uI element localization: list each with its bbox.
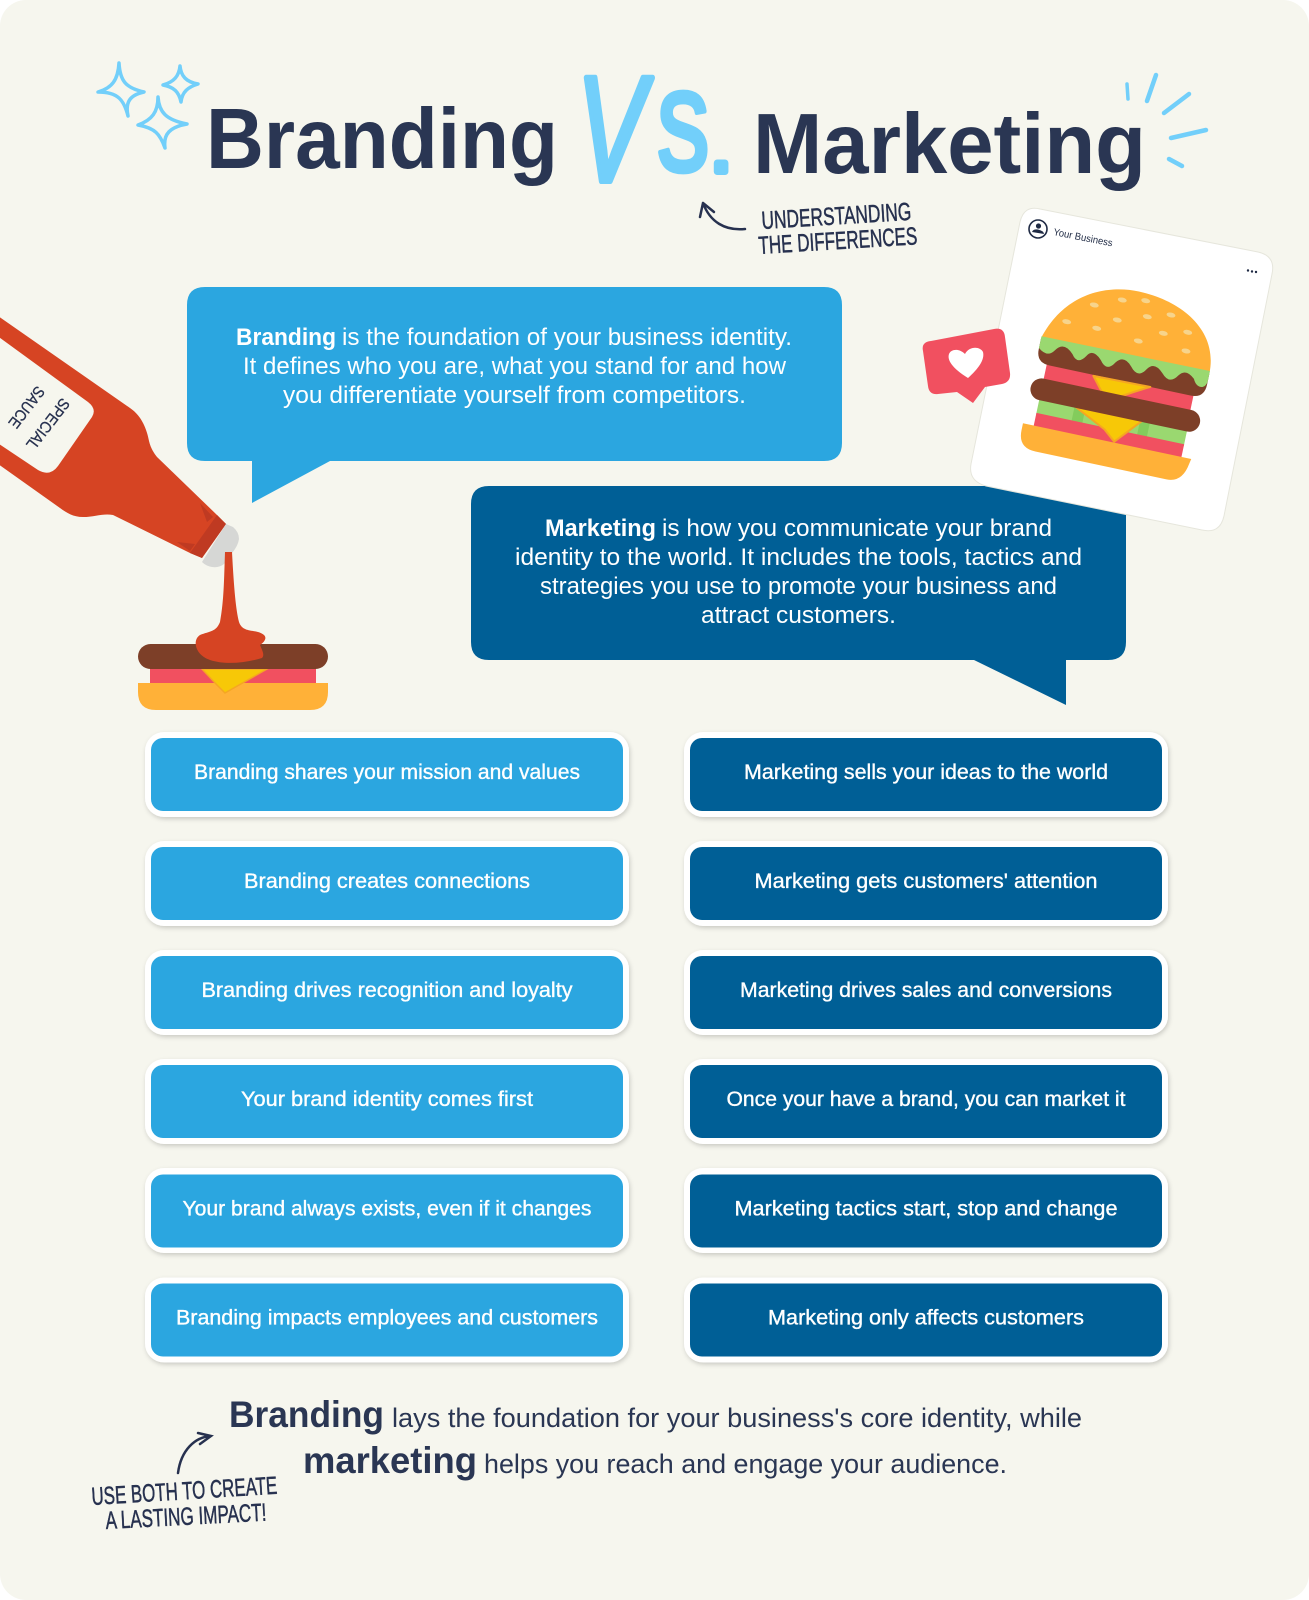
branding row 4: Your brand identity comes first — [241, 1088, 533, 1111]
bottle cap — [202, 524, 239, 567]
lettuce upper — [1038, 335, 1210, 388]
marketing row 5: Marketing tactics start, stop and change — [734, 1198, 1118, 1220]
subtitle line 1: UNDERSTANDING — [761, 198, 912, 235]
post name: Your Business — [1052, 227, 1113, 249]
cheese — [202, 669, 267, 693]
closing word: Branding: Branding — [229, 1394, 384, 1435]
closing line 2: helps you reach and engage your audience. — [484, 1449, 1007, 1479]
branding row 3: Branding drives recognition and loyalty — [202, 979, 573, 1002]
bubble text: It defines who you are, what you stand for and how — [243, 353, 787, 380]
branding row 6: Branding impacts employees and customers — [176, 1306, 598, 1330]
closing line 1: lays the foundation for your business's core identity, while — [392, 1403, 1082, 1433]
title word: Vs.: . — [710, 100, 732, 188]
icon: sparkles — [98, 63, 198, 148]
branding row 1: Branding shares your mission and values — [194, 761, 580, 784]
bubble text: is the foundation of your business identity. — [342, 324, 792, 351]
marketing row 6: Marketing only affects customers — [768, 1306, 1084, 1330]
lettuce lower — [1036, 394, 1188, 446]
title word: Marketing: Marketing — [753, 97, 1146, 192]
title word: Vs.: V — [577, 47, 653, 214]
icon: bottom burger with sauce — [138, 552, 328, 710]
bottle label — [0, 335, 94, 473]
panel: branding speech bubble — [187, 287, 842, 503]
marketing row 4 — [684, 1059, 1168, 1144]
marketing row 5 — [684, 1168, 1168, 1253]
bubble text: you differentiate yourself from competitors. — [283, 382, 746, 409]
icon: burger — [1018, 274, 1224, 484]
comparison rows: branding column — [145, 732, 629, 1362]
closing statement — [229, 1394, 1082, 1481]
marketing row 6 — [684, 1278, 1168, 1362]
marketing row 1 — [684, 732, 1168, 817]
lower cheese — [1070, 407, 1142, 446]
comparison rows: marketing column — [684, 732, 1168, 1362]
note line 1: USE BOTH TO CREATE — [91, 1472, 278, 1511]
icon: avatar — [1029, 220, 1047, 238]
branding row 2: Branding creates connections — [244, 870, 530, 893]
sauce stream — [196, 552, 265, 663]
icon: emphasis lines — [1127, 75, 1206, 166]
marketing row 2 — [684, 841, 1168, 926]
branding row 4 — [145, 1059, 629, 1144]
bottle body — [0, 316, 226, 558]
patty — [138, 644, 328, 669]
notification bubble — [923, 329, 1010, 403]
closing word: marketing: marketing — [303, 1440, 477, 1481]
panel: marketing speech bubble — [471, 486, 1126, 705]
label text: sauce: SAUCE — [5, 383, 47, 431]
branding row 2 — [145, 841, 629, 926]
bubble shape — [187, 287, 842, 503]
top bun — [1041, 274, 1223, 374]
tomato layer — [150, 665, 316, 685]
marketing row 4: Once your have a brand, you can market it — [726, 1088, 1126, 1111]
upper patty — [1036, 338, 1209, 398]
tomato lower — [1034, 413, 1184, 458]
subtitle handwritten — [758, 198, 918, 260]
arrow: to closing statement — [178, 1433, 211, 1473]
upper cheese — [1089, 375, 1150, 409]
bubble text: Marketing — [545, 515, 656, 542]
branding row 6 — [145, 1278, 629, 1362]
bubble text — [515, 515, 1082, 629]
marketing row 3: Marketing drives sales and conversions — [740, 979, 1112, 1002]
sesame seeds — [1062, 297, 1193, 354]
branding row 3 — [145, 950, 629, 1035]
title word: Vs.: s — [657, 39, 710, 201]
card — [971, 208, 1273, 531]
lower patty — [1028, 376, 1202, 434]
marketing row 1: Marketing sells your ideas to the world — [744, 761, 1108, 784]
bottle ring — [190, 515, 226, 558]
bottle neck shading — [177, 503, 213, 551]
branding row 5: Your brand always exists, even if it changes — [182, 1198, 592, 1220]
icon: sauce bottle — [0, 316, 239, 567]
bubble text: Branding — [236, 324, 336, 351]
arrow: to subtitle — [700, 203, 745, 229]
bubble text: identity to the world. It includes the tools, tactics and — [515, 544, 1082, 571]
panel: social media post card — [971, 208, 1273, 531]
bubble shape — [471, 486, 1126, 705]
branding row 1 — [145, 732, 629, 817]
bottom bun — [138, 683, 328, 710]
icon: like notification — [923, 329, 1010, 403]
label text: special: SPECIAL — [22, 395, 72, 453]
heart — [949, 348, 983, 378]
title word: Vs. — [577, 39, 732, 214]
branding row 5 — [145, 1168, 629, 1253]
icon: menu dots — [1247, 269, 1257, 273]
bubble text: is how you communicate your brand — [662, 515, 1052, 542]
subtitle line 2: THE DIFFERENCES — [758, 222, 918, 260]
marketing row 2: Marketing gets customers' attention — [754, 870, 1098, 893]
bubble text: strategies you use to promote your business and — [540, 573, 1057, 600]
bottom bun — [1018, 423, 1191, 484]
title word: Branding: Branding — [206, 92, 558, 187]
note line 2: A LASTING IMPACT! — [105, 1499, 267, 1535]
marketing row 3 — [684, 950, 1168, 1035]
lettuce shade — [1071, 402, 1151, 437]
bubble text — [236, 324, 792, 409]
tomato upper — [1041, 358, 1195, 424]
title — [206, 39, 1146, 214]
bubble text: attract customers. — [701, 602, 896, 629]
handwritten note — [91, 1472, 278, 1535]
